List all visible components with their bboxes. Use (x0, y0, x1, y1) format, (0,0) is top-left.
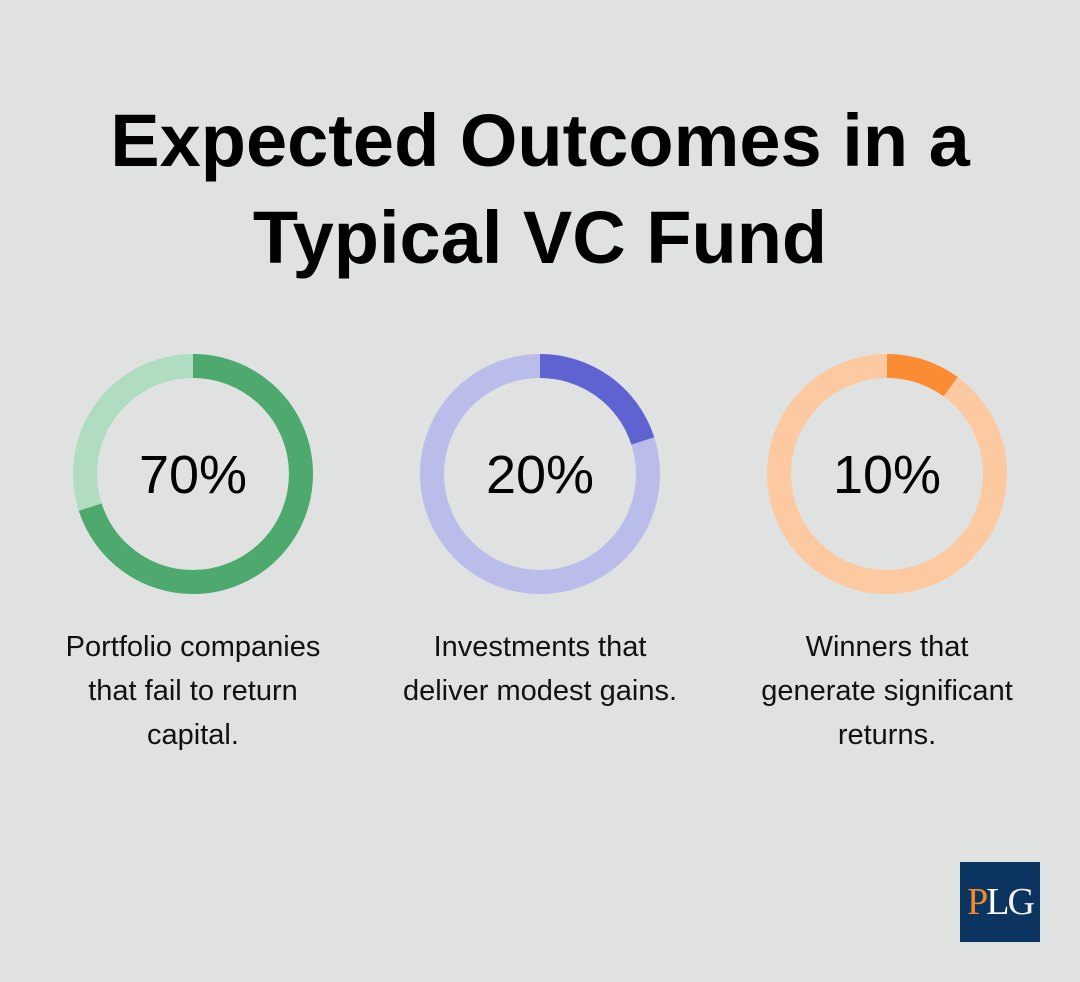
title: Typical VC Fund (253, 196, 827, 279)
text: 10% description (761, 631, 1013, 751)
text: 10% description: generate significant (761, 675, 1013, 707)
donut: 70% (85, 366, 301, 582)
text: 10% description: returns. (838, 719, 936, 751)
logo: PLG: PLG (967, 881, 1033, 923)
donut: 10%: 10% (833, 445, 941, 505)
logo: PLG (960, 862, 1040, 942)
donut: 70%: 70% (139, 445, 247, 505)
text: 10% description: Winners that (806, 631, 968, 663)
text: 70% description (66, 631, 320, 751)
text: 20% description: deliver modest gains. (403, 675, 677, 707)
donut: 20%: 20% (486, 445, 594, 505)
donut: 10% (779, 366, 995, 582)
text: 20% description (403, 631, 677, 707)
title (110, 99, 970, 279)
text: 70% description: capital. (147, 719, 239, 751)
title: Expected Outcomes in a (110, 99, 970, 182)
text: 20% description: Investments that (434, 631, 646, 663)
text: 70% description: Portfolio companies (66, 631, 320, 663)
donut: 20% (432, 366, 648, 582)
text: 70% description: that fail to return (88, 675, 298, 707)
